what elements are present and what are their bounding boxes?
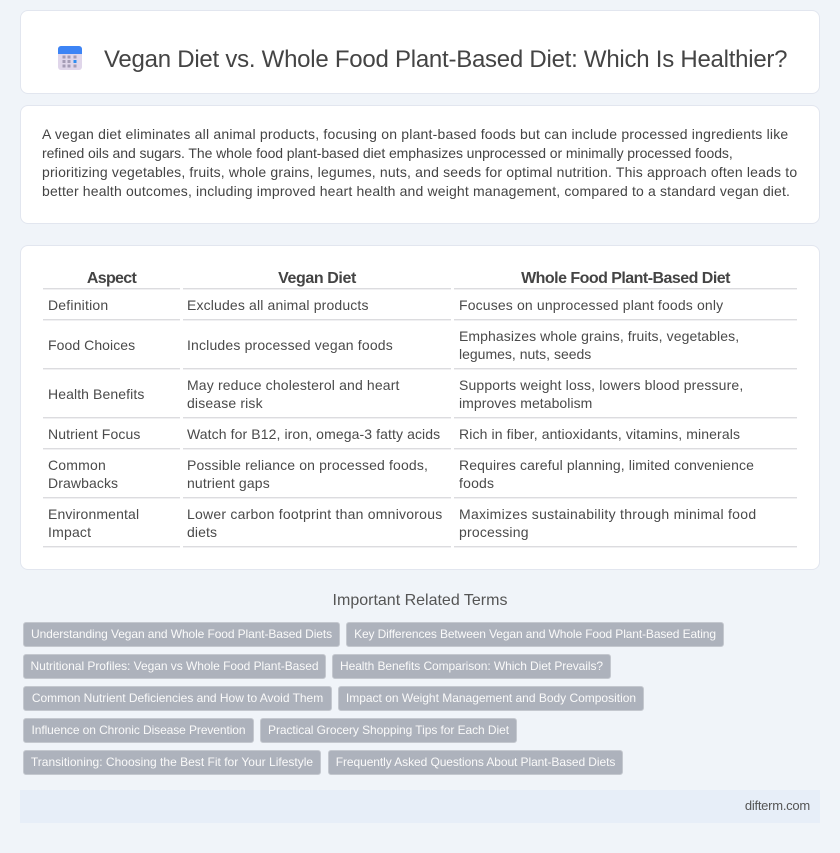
footer brand: difterm.com <box>745 798 810 813</box>
row: definition: Excludes all animal products <box>187 297 369 313</box>
row: common drawbacks <box>48 457 754 491</box>
tag <box>23 750 321 775</box>
row: health benefits: improves metabolism <box>459 395 592 411</box>
tag: Frequently Asked Questions About Plant-Based Diets <box>336 755 615 769</box>
intro text: refined oils and sugars. The whole food plant-based diet emphasizes unprocessed or minimally processed foods, <box>42 145 733 161</box>
intro text: prioritizing vegetables, fruits, whole grains, legumes, nuts, and seeds for optimal nutrition. This approach often leads to <box>42 164 797 180</box>
tag <box>23 718 254 743</box>
row: food choices: Food Choices <box>48 337 135 353</box>
table header: Whole Food Plant-Based Diet <box>521 270 730 287</box>
tag: Key Differences Between Vegan and Whole Food Plant-Based Eating <box>354 627 716 641</box>
row: definition: Focuses on unprocessed plant foods only <box>459 297 723 313</box>
tag: Transitioning: Choosing the Best Fit for Your Lifestyle <box>31 755 313 769</box>
tag: Nutritional Profiles: Vegan vs Whole Food Plant-Based <box>30 659 319 673</box>
row: common drawbacks: Requires careful planning, limited convenience <box>459 457 754 473</box>
row: nutrient focus: Rich in fiber, antioxidants, vitamins, minerals <box>459 426 740 442</box>
row: health benefits: Health Benefits <box>48 386 144 402</box>
tag <box>332 654 611 679</box>
table header <box>87 270 730 287</box>
tag <box>23 686 332 711</box>
tag <box>338 686 644 711</box>
row: definition: Definition <box>48 297 108 313</box>
tag <box>346 622 724 647</box>
row: health benefits: Supports weight loss, lowers blood pressure, <box>459 377 743 393</box>
row: health benefits <box>48 377 743 411</box>
tag: Impact on Weight Management and Body Composition <box>346 691 636 705</box>
row: nutrient focus <box>48 426 740 442</box>
tag <box>23 622 340 647</box>
tag: Health Benefits Comparison: Which Diet Prevails? <box>340 659 603 673</box>
table header: Aspect <box>87 270 136 287</box>
table <box>43 270 797 548</box>
intro text: better health outcomes, including improved heart health and weight management, compared to a standard vegan diet. <box>42 183 790 199</box>
icon: calendar <box>58 46 82 70</box>
table header: Vegan Diet <box>278 270 356 287</box>
tag: Practical Grocery Shopping Tips for Each Diet <box>268 723 509 737</box>
row: common drawbacks: Possible reliance on processed foods, <box>187 457 428 473</box>
row: environmental impact: processing <box>459 524 529 540</box>
row: environmental impact: diets <box>187 524 217 540</box>
row: health benefits: disease risk <box>187 395 263 411</box>
row: common drawbacks: Common <box>48 457 106 473</box>
row: definition <box>48 297 724 313</box>
row: environmental impact: Maximizes sustainability through minimal food <box>459 506 756 522</box>
heading: related terms: Important Related Terms <box>333 592 507 609</box>
row: food choices: Includes processed vegan foods <box>187 337 393 353</box>
row: nutrient focus: Watch for B12, iron, omega-3 fatty acids <box>187 426 440 442</box>
panel: intro paragraph <box>20 105 820 224</box>
tag: Common Nutrient Deficiencies and How to Avoid Them <box>32 691 323 705</box>
row: food choices: legumes, nuts, seeds <box>459 346 591 362</box>
row: nutrient focus: Nutrient Focus <box>48 426 140 442</box>
row: common drawbacks: nutrient gaps <box>187 475 270 491</box>
row: health benefits: May reduce cholesterol and heart <box>187 377 400 393</box>
row: environmental impact: Lower carbon footprint than omnivorous <box>187 506 442 522</box>
title: Vegan Diet vs. Whole Food Plant-Based Diet: Which Is Healthier? <box>104 46 787 73</box>
row: environmental impact: Environmental <box>48 506 139 522</box>
tag list <box>23 622 724 775</box>
tag <box>23 654 326 679</box>
tag: Understanding Vegan and Whole Food Plant-Based Diets <box>31 627 332 641</box>
row: environmental impact <box>48 506 756 540</box>
tag <box>328 750 623 775</box>
footer bar <box>20 790 820 823</box>
row: food choices: Emphasizes whole grains, fruits, vegetables, <box>459 328 739 344</box>
row: common drawbacks: foods <box>459 475 494 491</box>
row: food choices <box>48 328 739 362</box>
header panel <box>20 10 820 94</box>
row: common drawbacks: Drawbacks <box>48 475 118 491</box>
tag: Influence on Chronic Disease Prevention <box>32 723 245 737</box>
intro text: A vegan diet eliminates all animal products, focusing on plant-based foods but can include processed ingredients like <box>42 126 788 142</box>
panel: comparison table <box>20 245 820 570</box>
row: environmental impact: Impact <box>48 524 91 540</box>
tag <box>260 718 517 743</box>
intro text <box>42 126 797 199</box>
